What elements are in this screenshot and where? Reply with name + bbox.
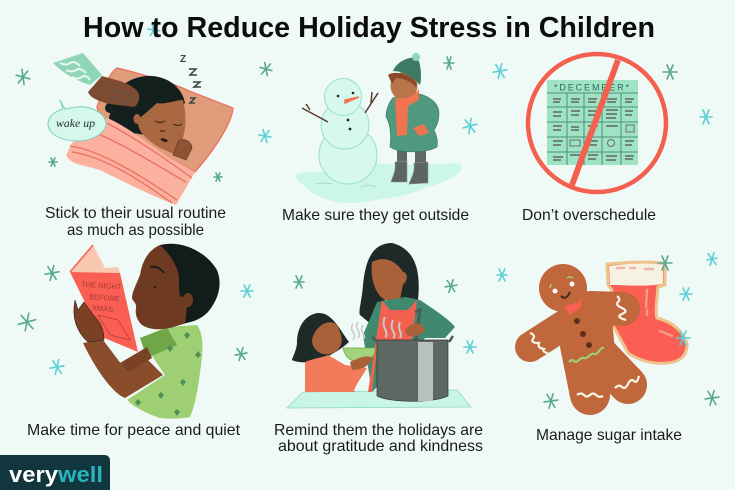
calendar heading: *DECEMBER*: [554, 82, 629, 92]
illustration: sleeping child: [48, 53, 233, 205]
caption: outside: Make sure they get outside: [282, 207, 469, 224]
book title: THE NIGHT: [81, 280, 122, 292]
caption: gratitude: about gratitude and kindness: [278, 438, 483, 455]
panel: outside: [282, 53, 469, 224]
caption: routine: Stick to their usual routine: [45, 205, 226, 222]
panel: peace and quiet: [27, 244, 241, 439]
illustration: snowman and child: [295, 53, 461, 203]
panel: overschedule: [522, 54, 666, 224]
caption: sugar: Manage sugar intake: [536, 427, 682, 444]
panel: usual routine: [45, 53, 233, 239]
logo: verywell: verywell: [9, 462, 103, 487]
illustration: gingerbread and stocking: [530, 256, 690, 397]
snowflakes: [14, 23, 720, 409]
illustration: parent and child with pot: [287, 243, 471, 408]
caption: routine: as much as possible: [67, 222, 204, 239]
book title: BEFORE: [89, 292, 120, 303]
panel: sugar: [530, 256, 690, 444]
title: How to Reduce Holiday Stress in Children: [83, 12, 655, 44]
illustration: crossed-out calendar: [528, 54, 666, 192]
bubble text: wake up: wake up: [56, 118, 95, 130]
illustration: child reading: [70, 244, 220, 419]
caption: gratitude: [274, 422, 483, 455]
book title: XMAS: [92, 303, 114, 314]
caption: gratitude: Remind them the holidays are: [274, 422, 483, 439]
panel: gratitude: [274, 243, 483, 455]
caption: peace and quiet: Make time for peace and quiet: [27, 422, 241, 439]
caption: overschedule: Don’t overschedule: [522, 207, 656, 224]
logo: verywell: [0, 455, 110, 490]
caption: routine: [45, 205, 226, 239]
book title: [81, 280, 122, 314]
sleep letters: Z: [180, 54, 186, 65]
